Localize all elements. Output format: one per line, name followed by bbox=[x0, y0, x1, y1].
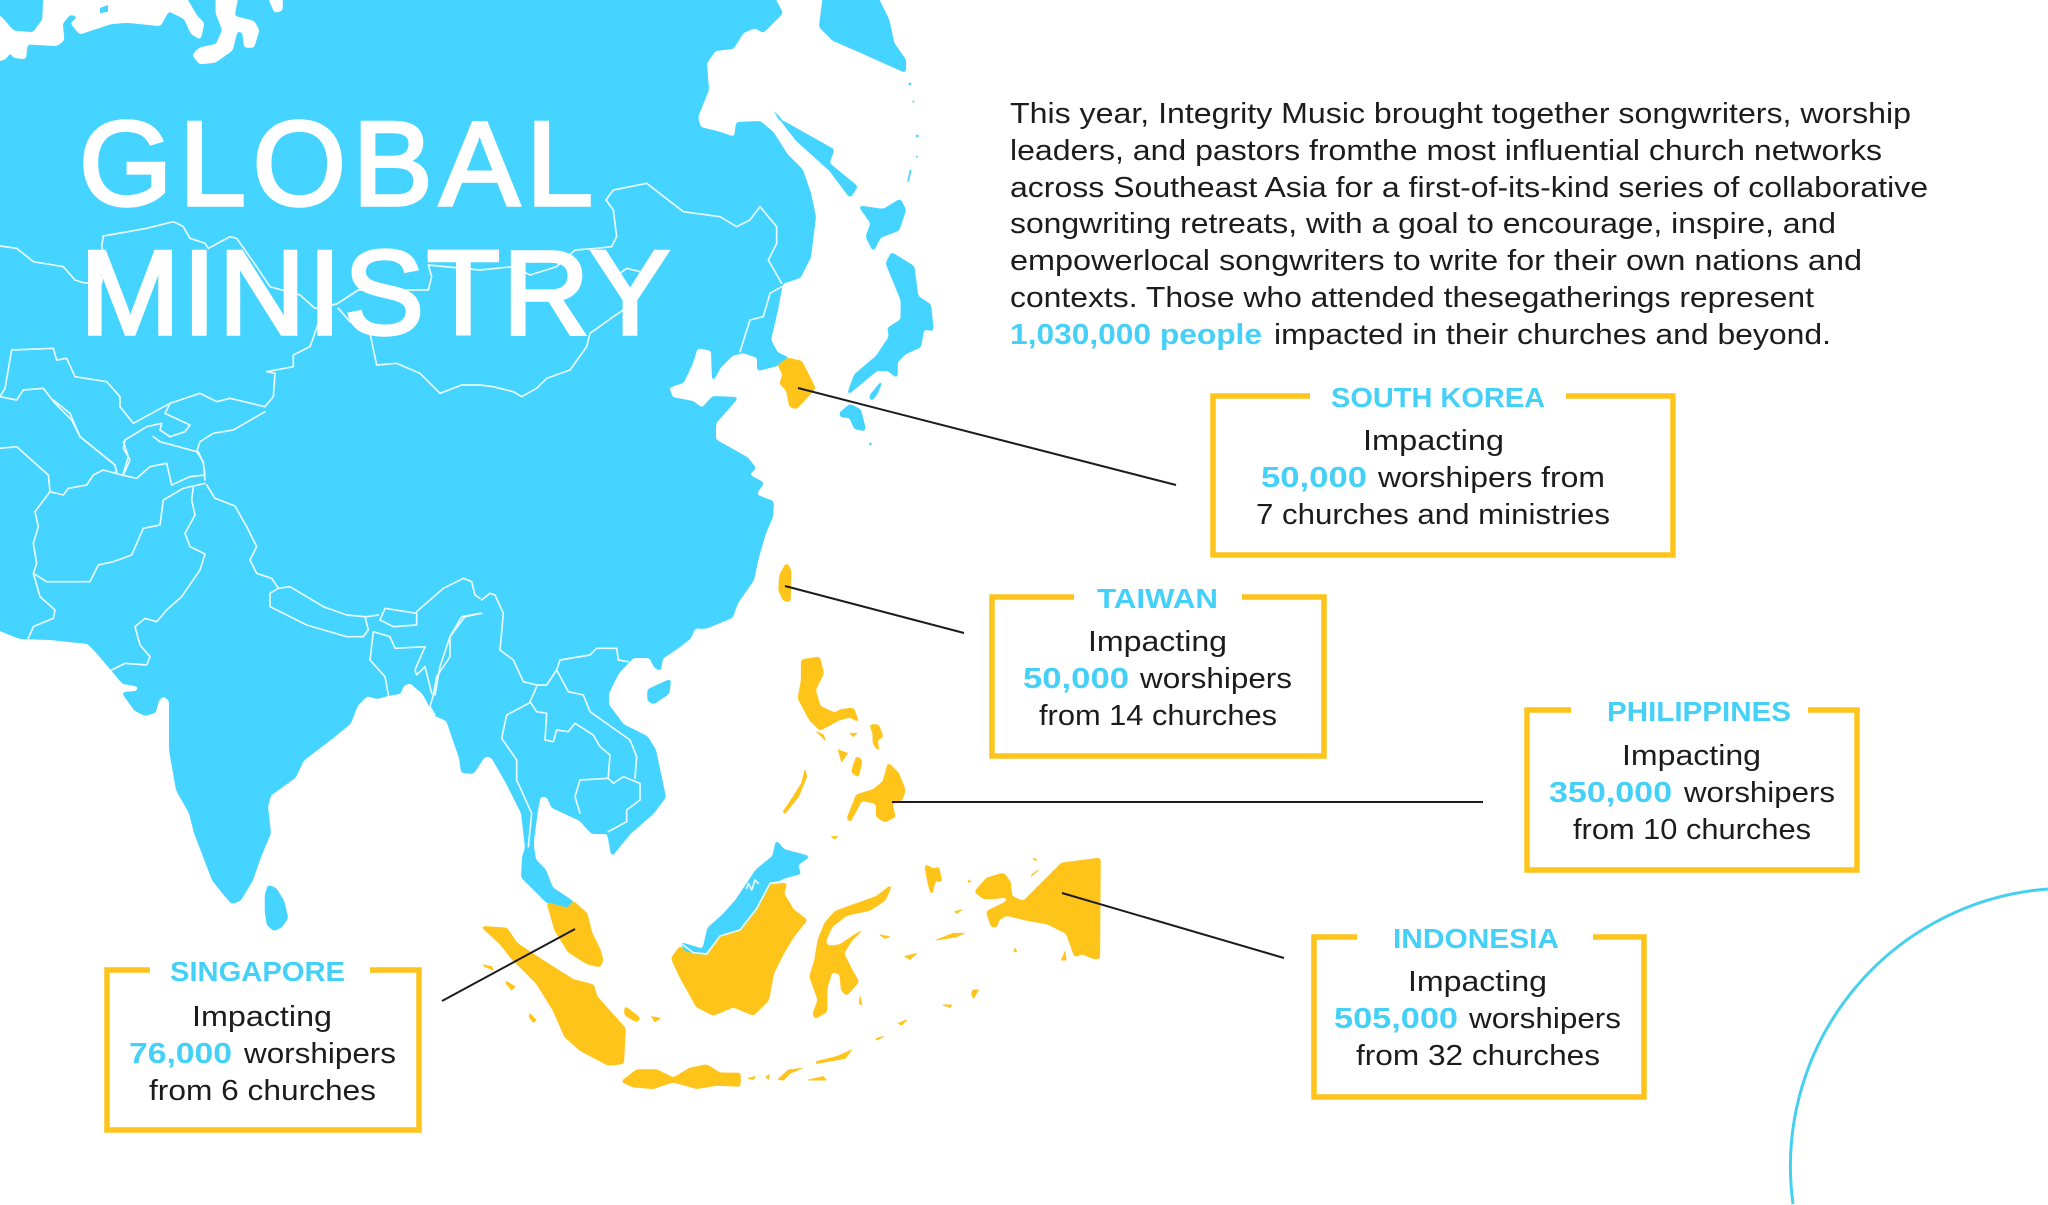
callout: Indonesia: 505,000 bbox=[1334, 1003, 1458, 1035]
island: Sri Lanka bbox=[265, 885, 288, 931]
intro paragraph: This year, Integrity Music brought together songwriters, worship bbox=[1010, 98, 1911, 130]
island: Hainan bbox=[648, 680, 670, 703]
highlighted: South Korea bbox=[778, 358, 815, 408]
landmass: Sarawak and Sabah bbox=[682, 842, 808, 953]
country borders: Mongolia and north-east China bbox=[480, 183, 782, 397]
callout: South Korea bbox=[1213, 382, 1673, 555]
callout: Philippines: from 10 churches bbox=[1573, 814, 1811, 846]
callout: Singapore: from 6 churches bbox=[149, 1075, 376, 1107]
landmass: mainland Asia bbox=[0, 0, 815, 908]
callout: Philippines: worshipers bbox=[1683, 777, 1835, 809]
intro paragraph: contexts. Those who attended thesegatherings represent bbox=[1010, 282, 1814, 314]
callout: Taiwan: Impacting bbox=[1088, 626, 1227, 658]
leader line: Philippines bbox=[892, 801, 1483, 803]
map of Asia bbox=[0, 0, 1100, 1088]
intro paragraph: leaders, and pastors fromthe most influential church networks bbox=[1010, 135, 1882, 167]
country borders: central Asia and Mongolia bbox=[0, 222, 480, 480]
highlighted: Sumatra, Malaya, Borneo, Java bbox=[482, 883, 852, 1088]
intro paragraph: 1,030,000 people bbox=[1010, 319, 1262, 351]
callout: Philippines: Impacting bbox=[1622, 740, 1761, 772]
callout: Philippines bbox=[1527, 696, 1857, 870]
callout: South Korea: 7 churches and ministries bbox=[1256, 499, 1610, 531]
callout: South Korea: Impacting bbox=[1363, 425, 1504, 457]
highlighted: eastern Indonesia bbox=[810, 858, 1100, 1040]
callout: Singapore bbox=[107, 956, 419, 1130]
callout: Indonesia: Impacting bbox=[1408, 966, 1547, 998]
callout: Taiwan: worshipers bbox=[1139, 663, 1292, 695]
highlighted: Philippines bbox=[783, 657, 905, 839]
country borders: south Asia bbox=[0, 400, 480, 695]
callout: Taiwan: 50,000 bbox=[1023, 663, 1129, 695]
country borders: south-east Asia bbox=[430, 593, 640, 847]
decorative circle arc bbox=[1790, 889, 2048, 1204]
border: Malaysia and Indonesia on Borneo bbox=[682, 880, 787, 954]
callout: South Korea: 50,000 bbox=[1261, 462, 1367, 494]
islands: Kuril chain bbox=[869, 83, 919, 445]
callout: Indonesia: from 32 churches bbox=[1356, 1040, 1600, 1072]
leader line: Singapore bbox=[442, 929, 575, 1001]
arctic coastline bbox=[0, 0, 282, 63]
title: GLOBAL bbox=[79, 97, 593, 231]
intro paragraph bbox=[1010, 98, 1928, 351]
callout: Taiwan: from 14 churches bbox=[1039, 700, 1277, 732]
callout: Indonesia: INDONESIA bbox=[1393, 923, 1559, 954]
leader line: Taiwan bbox=[785, 586, 964, 633]
title bbox=[79, 97, 670, 360]
highlighted: Taiwan bbox=[779, 563, 791, 602]
callout: Singapore: SINGAPORE bbox=[170, 956, 345, 987]
callout: Singapore: worshipers bbox=[243, 1038, 396, 1070]
islands: Kamchatka, Sakhalin, Japan bbox=[773, 0, 933, 430]
title: MINISTRY bbox=[80, 226, 670, 360]
leader line: South Korea bbox=[798, 388, 1176, 485]
intro paragraph: impacted in their churches and beyond. bbox=[1274, 319, 1831, 351]
callout: Singapore: Impacting bbox=[192, 1001, 332, 1033]
intro paragraph: songwriting retreats, with a goal to encourage, inspire, and bbox=[1010, 208, 1836, 240]
callout: South Korea: worshipers from bbox=[1377, 462, 1605, 494]
callout: Philippines: PHILIPPINES bbox=[1607, 696, 1791, 727]
arctic inlet bbox=[100, 5, 108, 13]
callout: Singapore: 76,000 bbox=[129, 1038, 232, 1070]
intro paragraph: empowerlocal songwriters to write for their own nations and bbox=[1010, 245, 1862, 277]
callout: South Korea: SOUTH KOREA bbox=[1331, 382, 1545, 413]
intro paragraph: across Southeast Asia for a first-of-its-kind series of collaborative bbox=[1010, 172, 1928, 204]
callout: Taiwan: TAIWAN bbox=[1097, 583, 1218, 614]
callout: Indonesia bbox=[1314, 923, 1644, 1097]
callout: Indonesia: worshipers bbox=[1468, 1003, 1621, 1035]
callout: Philippines: 350,000 bbox=[1549, 777, 1672, 809]
leader line: Indonesia bbox=[1062, 893, 1284, 958]
callout: Taiwan bbox=[992, 583, 1324, 756]
